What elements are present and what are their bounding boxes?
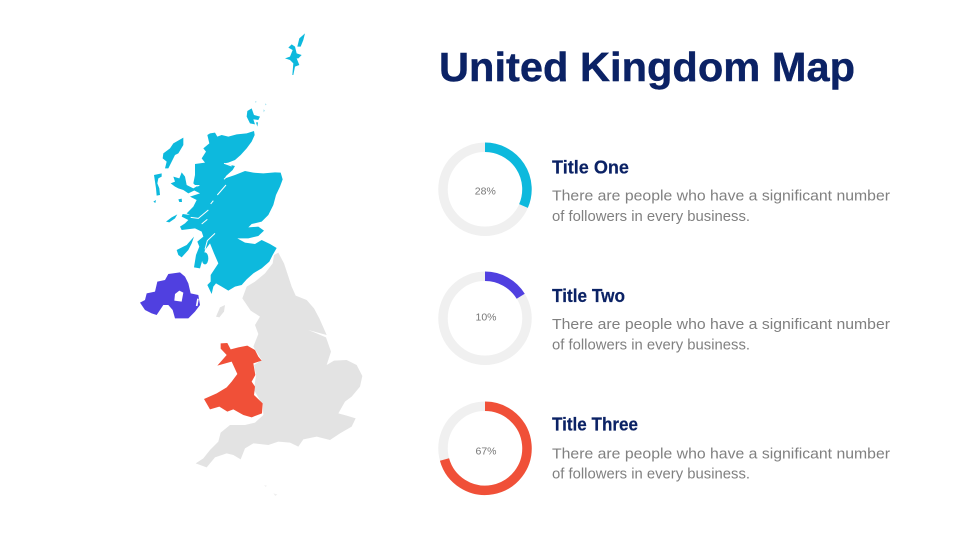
Skye (171, 172, 198, 202)
Lewis and Harris (163, 138, 183, 168)
region: Scotland (153, 33, 305, 294)
description: There are people who have a significant number (552, 445, 890, 462)
donut chart: 67%: 67% (475, 445, 497, 457)
map of the United Kingdom (140, 33, 362, 496)
Tiree and Coll (166, 214, 177, 222)
description: There are people who have a significant number (552, 188, 890, 205)
Uists (153, 173, 162, 203)
heading: Title Two: Title Two (552, 285, 625, 306)
Orkney (247, 101, 267, 127)
item one (443, 147, 890, 231)
donut chart: 10% (443, 276, 527, 360)
title: United Kingdom Map (439, 44, 855, 90)
description: of followers in every business. (552, 208, 750, 225)
description (552, 316, 890, 353)
region: England (196, 253, 362, 496)
donut chart: 28% (443, 147, 527, 231)
Shetland (285, 33, 305, 75)
donut chart: 10%: 10% (475, 312, 497, 324)
donut chart: 28%: 28% (475, 185, 496, 197)
Islay and Jura (177, 237, 194, 257)
item three (443, 406, 890, 490)
Isle of Man (216, 305, 225, 317)
Arran (202, 252, 208, 264)
heading: Title Three: Title Three (552, 414, 638, 435)
description: of followers in every business. (552, 336, 750, 353)
description (552, 188, 890, 225)
item two (443, 276, 890, 360)
heading: Title One: Title One (552, 156, 629, 177)
donut chart: 67% (443, 406, 527, 490)
description: of followers in every business. (552, 466, 750, 483)
region: Wales (204, 343, 263, 417)
Isles of Scilly (264, 485, 277, 496)
description: There are people who have a significant number (552, 316, 890, 333)
sea lochs (191, 163, 232, 249)
region: Northern Ireland (140, 272, 200, 318)
description (552, 445, 890, 483)
